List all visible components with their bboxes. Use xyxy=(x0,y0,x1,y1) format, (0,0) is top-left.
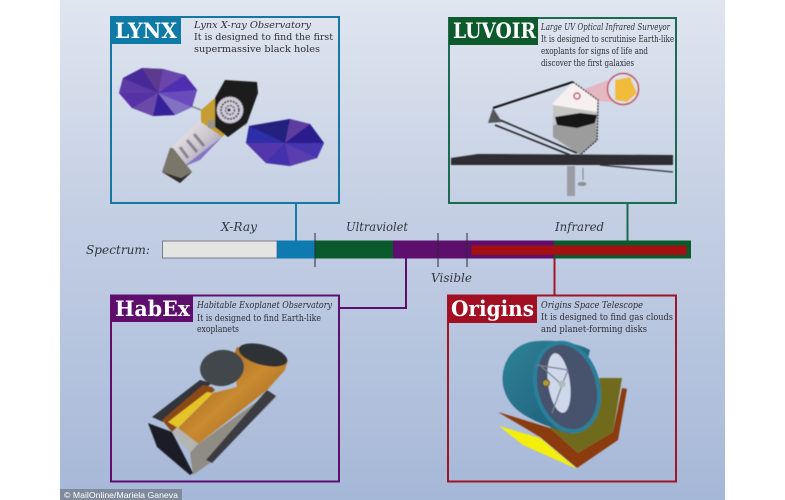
LUVOIR description: exoplants for signs of life and xyxy=(541,47,648,57)
infrared band (LUVOIR) xyxy=(554,240,691,258)
X-ray band xyxy=(162,241,277,258)
illustration: LUVOIR telescope xyxy=(451,74,673,196)
Lynx description: Lynx X-ray Observatory xyxy=(193,20,312,31)
HabEx description: exoplanets xyxy=(197,324,239,335)
Origins description: It is designed to find gas clouds xyxy=(541,312,673,323)
ultraviolet and visible band (HabEx) xyxy=(393,240,554,258)
HabEx description xyxy=(196,300,333,335)
LUVOIR description: Large UV Optical Infrared Surveyor xyxy=(540,23,671,33)
Origins description: and planet-forming disks xyxy=(541,324,647,335)
credit: © MailOnline/Mariela Ganeva xyxy=(64,490,178,500)
connector: Lynx to spectrum xyxy=(295,203,297,241)
panel: LUVOIR xyxy=(449,17,676,203)
Lynx description: It is designed to find the first xyxy=(194,32,333,43)
spectrum label: Spectrum: xyxy=(86,243,150,257)
illustration: Origins telescope xyxy=(498,333,627,469)
spectrum tick marks xyxy=(315,233,467,267)
connector: HabEx to spectrum xyxy=(339,258,406,308)
HabEx description: It is designed to find Earth-like xyxy=(197,313,321,324)
LUVOIR name badge: LUVOIR xyxy=(453,18,536,43)
Lynx description: supermassive black holes xyxy=(194,44,320,55)
Origins name badge: Origins xyxy=(451,296,534,321)
Ultraviolet label: Ultraviolet xyxy=(346,220,408,234)
ultraviolet band (LUVOIR) xyxy=(315,240,393,258)
illustration: HabEx telescope xyxy=(148,339,290,475)
Visible label: Visible xyxy=(431,271,472,285)
LUVOIR description: discover the first galaxies xyxy=(541,59,634,69)
connector: LUVOIR to spectrum xyxy=(626,203,628,241)
infrared band (Origins) xyxy=(472,246,686,255)
panel: Lynx xyxy=(110,16,339,203)
Infrared label: Infrared xyxy=(554,220,604,234)
connector: Origins to spectrum xyxy=(554,255,556,295)
HabEx name badge: HabEx xyxy=(115,296,190,321)
Lynx name badge: LYNX xyxy=(115,18,178,43)
X-ray band (Lynx) xyxy=(277,240,315,258)
LUVOIR description xyxy=(540,23,674,69)
Origins description: Origins Space Telescope xyxy=(541,300,643,311)
HabEx description: Habitable Exoplanet Observatory xyxy=(196,300,333,311)
spectrum bar xyxy=(86,220,691,285)
illustration: Lynx telescope xyxy=(119,68,324,183)
panel: Origins xyxy=(448,295,676,482)
Lynx description xyxy=(193,20,333,55)
panel: HabEx xyxy=(111,295,339,482)
LUVOIR description: It is designed to scrutinise Earth-like xyxy=(541,35,674,45)
Origins description xyxy=(541,300,673,335)
X-Ray label: X-Ray xyxy=(220,220,257,234)
